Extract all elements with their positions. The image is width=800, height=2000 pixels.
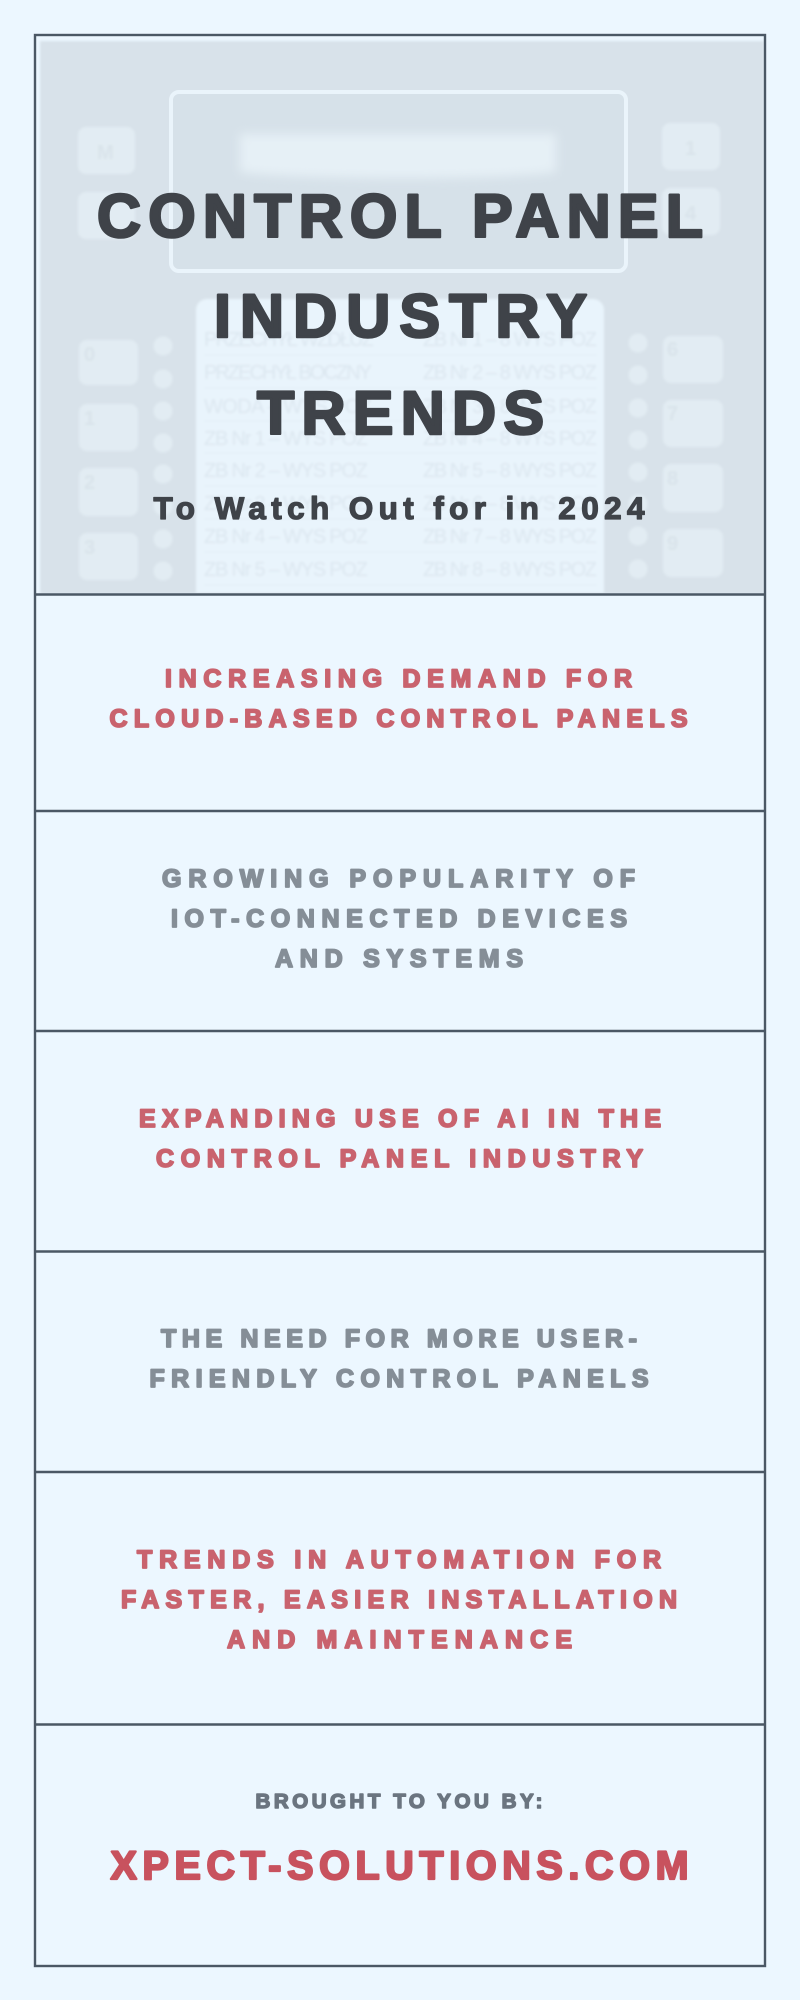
trend 5 text xyxy=(121,1546,677,1654)
label sheet: ZB Nr 2 – 8 WYS POZ xyxy=(423,362,597,384)
trend 3 text: EXPANDING USE OF AI IN THE xyxy=(139,1105,661,1133)
label sheet: ZB Nr 2 – WYS POZ xyxy=(204,460,368,482)
panel: trend 2 xyxy=(36,812,764,1031)
footer byline: BROUGHT TO YOU BY: xyxy=(256,1790,542,1813)
keypad buttons right: 9 xyxy=(667,533,678,555)
label sheet: ZB Nr 5 – 8 WYS POZ xyxy=(423,460,597,482)
label sheet: ZB Nr 3 – WYS POZ xyxy=(204,493,368,515)
label sheet: ZB Nr 4 – 8 WYS POZ xyxy=(423,428,597,450)
trend 2 text: AND SYSTEMS xyxy=(275,945,523,973)
label sheet: PRZECHYŁ BOCZNY xyxy=(204,362,372,384)
hero background photo xyxy=(40,41,764,594)
panel: trend 3 xyxy=(36,1032,764,1251)
title: INDUSTRY xyxy=(214,282,587,350)
label sheet: ZB Nr 8 – 8 WYS POZ xyxy=(423,559,597,581)
keypad buttons right xyxy=(628,123,723,578)
trend 2 text: IOT-CONNECTED DEVICES xyxy=(171,905,627,933)
keypad buttons right: 1 xyxy=(685,138,696,160)
trend 1 text: INCREASING DEMAND FOR xyxy=(165,665,632,693)
trend 4 text: THE NEED FOR MORE USER- xyxy=(161,1325,637,1353)
panel: hero header with control panel photo xyxy=(36,36,764,594)
label sheet: ZB Nr 1 – 8 WYS POZ xyxy=(423,329,597,351)
label sheet: ZB Nr 3 – 8 WYS POZ xyxy=(423,396,597,418)
panel: trend 4 xyxy=(36,1252,764,1472)
trend 1 text: CLOUD-BASED CONTROL PANELS xyxy=(110,705,688,733)
display frame xyxy=(171,92,626,271)
keypad buttons right: 4 xyxy=(685,203,697,225)
trend 5 text: AND MAINTENANCE xyxy=(227,1626,572,1654)
title: CONTROL PANEL xyxy=(97,182,703,250)
label sheet: ZB Nr 6 – 8 WYS POZ xyxy=(423,493,597,515)
panel: trend 5 xyxy=(36,1473,764,1724)
trend 5 text: FASTER, EASIER INSTALLATION xyxy=(121,1586,677,1614)
panel: trend 1 xyxy=(36,595,764,811)
keypad buttons right: 8 xyxy=(667,468,678,490)
trend 5 text: TRENDS IN AUTOMATION FOR xyxy=(137,1546,661,1574)
keypad buttons left: 3 xyxy=(84,537,95,559)
keypad buttons left: 0 xyxy=(84,344,95,366)
trend 4 text: FRIENDLY CONTROL PANELS xyxy=(150,1365,648,1393)
subtitle: To Watch Out for in 2024 xyxy=(154,490,645,526)
trend 2 text xyxy=(162,865,635,973)
keypad buttons right: 7 xyxy=(667,403,678,425)
keypad buttons left: M xyxy=(97,142,114,164)
footer website: XPECT-SOLUTIONS.COM xyxy=(110,1844,688,1888)
label sheet: WODA – WYS POZ xyxy=(204,396,372,418)
label sheet: ZB Nr 5 – WYS POZ xyxy=(204,559,368,581)
label sheet: ZB Nr 1 – WYS POZ xyxy=(204,428,368,450)
trend 4 text xyxy=(150,1325,648,1393)
keypad buttons left: 2 xyxy=(84,472,95,494)
label sheet: ZB Nr 7 – 8 WYS POZ xyxy=(423,526,597,548)
label sheet: PRZECHYŁ WZDŁUŻ xyxy=(204,328,374,351)
title: TRENDS xyxy=(257,379,544,447)
keypad buttons left xyxy=(78,127,172,580)
panel: footer xyxy=(36,1725,764,1965)
keypad buttons right: 6 xyxy=(667,339,678,361)
trend 3 text xyxy=(139,1105,661,1173)
trend 2 text: GROWING POPULARITY OF xyxy=(162,865,635,893)
label sheet: ZB Nr 4 – WYS POZ xyxy=(204,526,368,548)
trend 3 text: CONTROL PANEL INDUSTRY xyxy=(156,1145,643,1173)
label sheet xyxy=(196,299,604,593)
trend 1 text xyxy=(110,665,688,733)
keypad buttons left: 1 xyxy=(84,408,95,430)
title xyxy=(97,182,703,447)
